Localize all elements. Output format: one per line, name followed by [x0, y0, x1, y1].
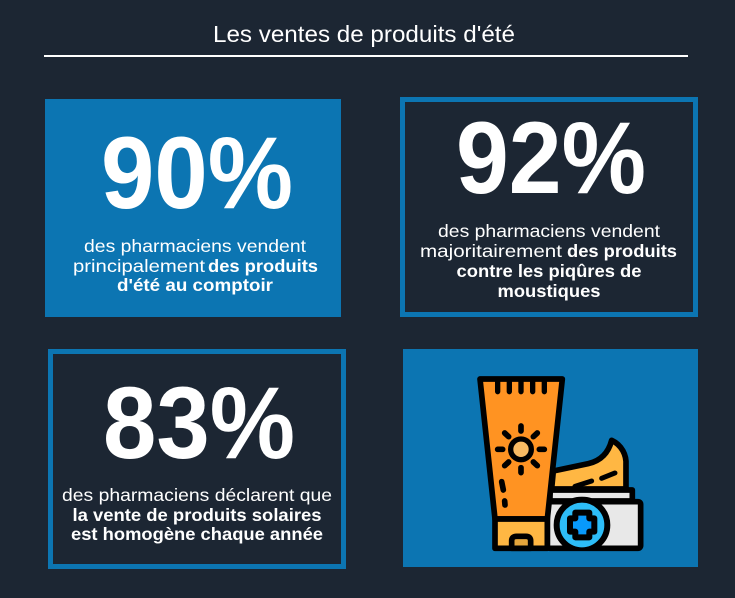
text: 90% description [73, 236, 318, 295]
tube marks [502, 482, 505, 505]
sun [511, 439, 531, 460]
text: 92% description [420, 221, 677, 301]
text: 92% description: des pharmaciens vendent [438, 221, 660, 241]
text: 83% description: des pharmaciens déclarent que [62, 485, 332, 505]
text: 90% description: des produits [208, 256, 318, 276]
title: Les ventes de produits d'été [213, 21, 515, 47]
text: 90% description: d'été au comptoir [117, 275, 273, 295]
cream streaks [575, 473, 615, 486]
panel: illustration [403, 349, 698, 567]
tube [480, 379, 562, 519]
text: 92% description: des produits [567, 241, 677, 261]
stat: 90%: 90% [101, 116, 293, 230]
panel: 92% [402, 100, 696, 314]
panel: 83% [50, 352, 344, 566]
text: 92% description: majoritairement [420, 241, 562, 261]
text: 92% description: contre les piqûres de [456, 261, 642, 281]
text: 83% description: est homogène chaque année [71, 524, 323, 544]
crimp marks [498, 381, 544, 392]
medical cross [570, 513, 594, 537]
cream [552, 440, 626, 489]
medical badge [557, 500, 607, 550]
text: 90% description: des pharmaciens vendent [84, 236, 306, 256]
stat: 92%: 92% [456, 101, 646, 215]
icon: sun cream tube and jar [480, 379, 641, 550]
jar lid [550, 490, 632, 501]
text: 92% description: moustiques [498, 281, 601, 301]
jar body [547, 502, 641, 548]
text: 83% description: la vente de produits solaires [72, 505, 322, 525]
stat: 83%: 83% [103, 366, 295, 480]
panel: 90% [45, 99, 341, 317]
cap notch [512, 536, 531, 548]
tube cap [495, 519, 547, 548]
text: 83% description [62, 485, 332, 544]
text: 90% description: principalement [73, 256, 205, 276]
